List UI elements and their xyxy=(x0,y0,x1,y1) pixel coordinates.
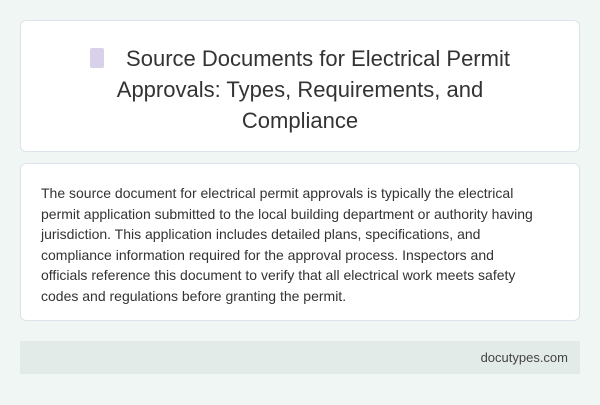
icon: document xyxy=(90,48,104,68)
text block: The source document for electrical permit approvals is typically the electrical permit application submitted to the local building department or authority having jurisdiction. This application includes detailed plans, specifications, and compliance information required for the approval process. Inspectors and officials reference this document to verify that all electrical work meets safety codes and regulations before granting the permit. xyxy=(41,185,533,304)
footer xyxy=(20,341,580,374)
title: Source Documents for Electrical Permit Approvals: Types, Requirements, and Compliance xyxy=(117,46,510,133)
footer: docutypes.com xyxy=(481,350,568,365)
panel: title card xyxy=(20,20,580,152)
panel: description xyxy=(20,163,580,321)
